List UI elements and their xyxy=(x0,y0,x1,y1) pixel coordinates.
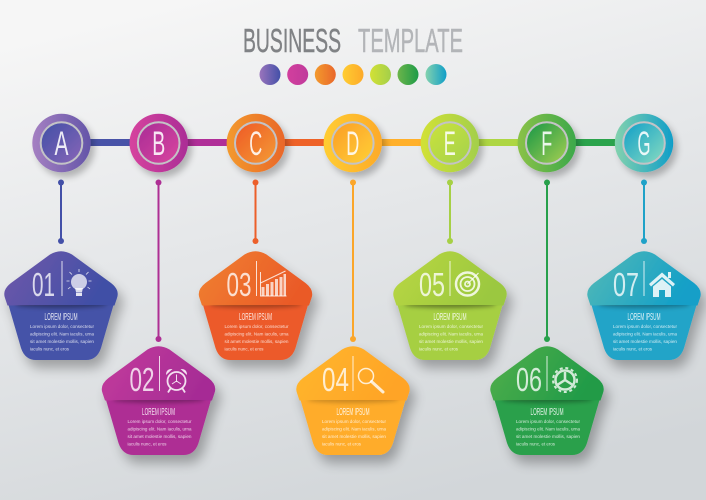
stem F xyxy=(544,180,550,342)
panel: 01 xyxy=(4,251,118,360)
panel: 04: iaculis nunc, et eros xyxy=(322,442,362,446)
node E: E xyxy=(444,125,456,163)
node A: A xyxy=(54,125,69,163)
stem E xyxy=(447,180,453,244)
panel: 06: 06 xyxy=(516,361,542,398)
title: BUSINESS xyxy=(243,22,341,59)
panel: 06: sit amet molestie mollis, sapien xyxy=(516,434,580,439)
panel: 01: Lorem ipsum dolor, consectetur xyxy=(30,324,94,329)
panel: 02: Lorem ipsum dolor, consectetur xyxy=(128,419,192,424)
panel: 06 xyxy=(490,346,604,455)
node C: C xyxy=(249,125,262,163)
panel: 05: sit amet molestie mollis, sapien xyxy=(419,339,483,344)
panel: 03: Lorem ipsum dolor, consectetur xyxy=(224,324,289,329)
panel: 01: adipiscing elit. Nam iaculis, urna xyxy=(30,332,94,336)
panel: 06: iaculis nunc, et eros xyxy=(516,442,556,446)
node G: G xyxy=(638,125,650,163)
panel: 07: adipiscing elit. Nam iaculis, urna xyxy=(613,332,677,336)
icon: alarm clock xyxy=(166,369,187,392)
node D xyxy=(324,114,382,172)
node A xyxy=(32,114,91,172)
icon: gear xyxy=(553,368,577,392)
panel: 01: 01 xyxy=(32,266,55,303)
panel: 07: sit amet molestie mollis, sapien xyxy=(613,339,677,344)
panel: 02: sit amet molestie mollis, sapien xyxy=(128,434,192,439)
panel: 07: Lorem ipsum dolor, consectetur xyxy=(613,324,677,329)
node B xyxy=(130,114,188,172)
panel: 05: Lorem ipsum dolor, consectetur xyxy=(419,324,483,329)
node E xyxy=(421,114,479,172)
node F: F xyxy=(541,125,552,163)
panel: 05: iaculis nunc, et eros xyxy=(419,346,459,352)
node G xyxy=(615,114,673,172)
connector bars xyxy=(88,139,617,146)
node D: D xyxy=(346,125,359,163)
panel: 03: adipiscing elit. Nam iaculis, urna xyxy=(224,332,289,336)
panel: 02: 02 xyxy=(130,361,154,398)
stem C xyxy=(252,180,258,244)
panel: 02: iaculis nunc, et eros xyxy=(128,442,167,446)
panel: 04: adipiscing elit. Nam iaculis, urna xyxy=(322,426,386,432)
icon: house xyxy=(649,272,675,297)
icon: magnifier xyxy=(358,368,383,392)
panel: 06: adipiscing elit. Nam iaculis, urna xyxy=(516,426,580,432)
panel: 03: sit amet molestie mollis, sapien xyxy=(224,339,289,344)
node B: B xyxy=(152,125,165,163)
icon: light bulb xyxy=(66,269,92,296)
panel: 02 xyxy=(102,346,215,455)
panel: 05: LOREM IPSUM xyxy=(434,312,466,323)
panel: 06: LOREM IPSUM xyxy=(530,407,564,418)
panel: 04: 04 xyxy=(322,361,349,398)
icon: target xyxy=(456,272,479,296)
stem B xyxy=(156,180,162,342)
panel: 04: Lorem ipsum dolor, consectetur xyxy=(322,419,386,424)
title: TEMPLATE xyxy=(358,22,463,59)
panel: 03: iaculis nunc, et eros xyxy=(224,346,264,352)
panel: 05: adipiscing elit. Nam iaculis, urna xyxy=(419,332,483,336)
panel: 02: LOREM IPSUM xyxy=(142,407,175,418)
node C xyxy=(227,114,285,172)
panel: 07: iaculis nunc, et eros xyxy=(613,346,653,352)
panel: 07: LOREM IPSUM xyxy=(628,312,660,323)
stem A xyxy=(58,180,64,244)
panel: 01: iaculis nunc, et eros xyxy=(30,346,70,352)
panel: 03: 03 xyxy=(226,266,252,303)
panel: 05 xyxy=(393,251,507,360)
panel: 04: LOREM IPSUM xyxy=(336,407,370,418)
panel: 04: sit amet molestie mollis, sapien xyxy=(322,434,386,439)
stem D xyxy=(350,180,356,342)
panel: 05: 05 xyxy=(419,266,445,303)
panel: 07: 07 xyxy=(613,266,639,303)
panel: 03 xyxy=(199,251,312,360)
panel: 03: LOREM IPSUM xyxy=(239,312,272,323)
panel: 02: adipiscing elit. Nam iaculis, urna xyxy=(128,426,192,432)
panel: 01: LOREM IPSUM xyxy=(44,312,78,323)
panel: 07 xyxy=(587,251,701,360)
panel: 01: sit amet molestie mollis, sapien xyxy=(30,339,94,344)
node F xyxy=(518,114,576,172)
panel: 06: Lorem ipsum dolor, consectetur xyxy=(516,419,580,424)
colour dots row xyxy=(260,64,446,85)
icon: bar chart xyxy=(260,271,286,296)
stem G xyxy=(641,180,647,244)
panel: 04 xyxy=(296,346,410,455)
